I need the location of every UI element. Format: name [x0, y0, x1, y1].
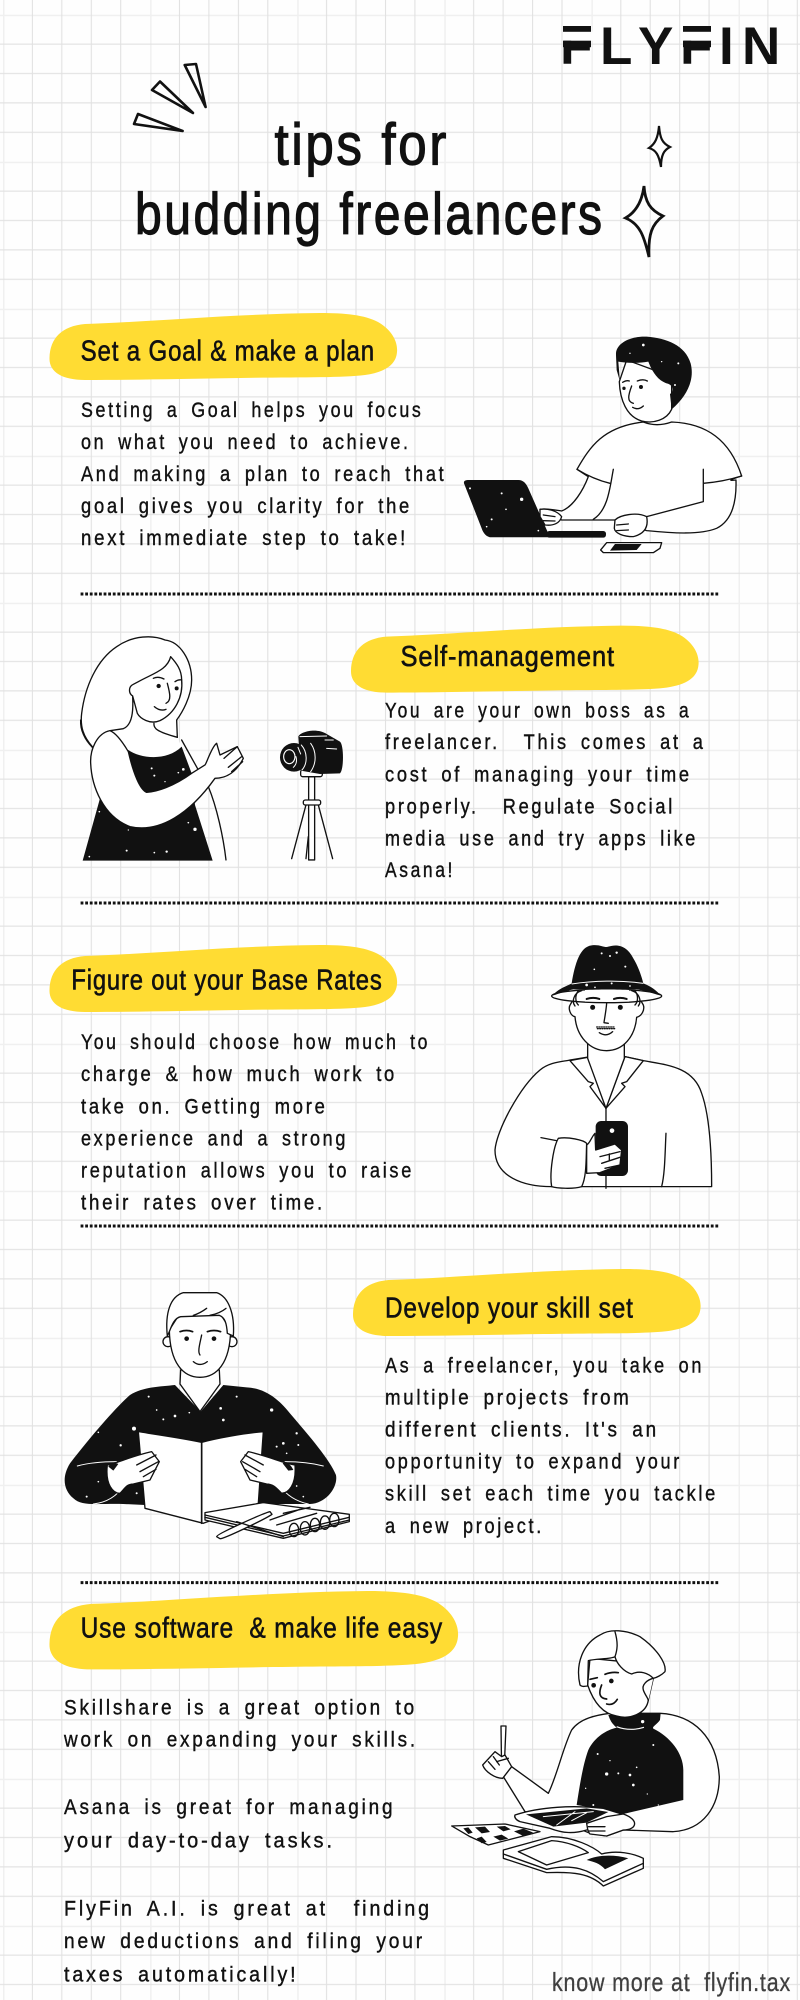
text block: self-management: freelancer. This comes at a — [385, 730, 706, 754]
text block: skill set — [385, 1353, 718, 1538]
logo: FLYFIN: FLYFIN — [560, 17, 780, 76]
heading: base rates: Figure out your Base Rates — [71, 965, 383, 997]
heading: skill set — [353, 1269, 701, 1336]
text block: skill set: different clients. It's an — [385, 1417, 659, 1441]
illustration: man with hat and phone — [495, 945, 712, 1188]
icon: open magazine — [503, 1837, 643, 1886]
text block: self-management: cost of managing your time — [385, 762, 692, 786]
text block: skill set: opportunity to expand your — [385, 1450, 682, 1474]
divider 1 — [81, 592, 719, 596]
icon: camera on tripod — [280, 731, 343, 860]
heading: software: Use software & make life easy — [81, 1613, 443, 1645]
panel: set a goal — [49, 313, 742, 553]
icon: large sparkle — [626, 186, 663, 257]
text block: self-management: You are your own boss as a — [385, 699, 691, 723]
text block: software: FlyFin A.I. is great at finding — [64, 1897, 432, 1921]
text block: base rates: You should choose how much to — [81, 1030, 430, 1054]
heading: software — [49, 1591, 458, 1669]
text block: software: Skillshare is a great option to — [64, 1695, 417, 1719]
icon: contact sheet — [452, 1824, 540, 1845]
icon: burst strokes — [134, 64, 206, 131]
text block: set a goal: Setting a Goal helps you focus — [81, 398, 424, 422]
illustration: man at laptop — [464, 337, 742, 553]
title: budding freelancers — [135, 182, 605, 247]
text block: software: work on expanding your skills. — [63, 1728, 418, 1752]
illustration: person with tablet — [452, 1631, 719, 1886]
panel: skill set — [65, 1269, 718, 1539]
title — [135, 113, 605, 247]
text block: software: Asana is great for managing — [64, 1795, 395, 1819]
text block: self-management — [385, 699, 706, 882]
title: tips for — [274, 113, 449, 178]
icon: notebook and pencil — [205, 1503, 349, 1539]
text block: set a goal: And making a plan to reach that — [81, 462, 446, 486]
text block: set a goal: goal gives you clarity for the — [81, 494, 412, 518]
text block: base rates: charge & how much work to — [81, 1062, 397, 1086]
heading: skill set: Develop your skill set — [385, 1292, 634, 1324]
text block: software: your day-to-day tasks. — [64, 1828, 335, 1852]
heading: set a goal — [49, 313, 397, 380]
text block: base rates: take on. Getting more — [81, 1095, 328, 1119]
text block: set a goal: next immediate step to take! — [81, 526, 408, 550]
text block: base rates — [81, 1030, 430, 1214]
illustration: woman with camera — [81, 637, 343, 861]
text block: skill set: As a freelancer, you take on — [385, 1353, 704, 1377]
text block: software: new deductions and filing your — [64, 1929, 425, 1953]
heading: self-management: Self-management — [400, 641, 615, 673]
text block: set a goal: on what you need to achieve. — [81, 430, 411, 454]
text block: skill set: a new project. — [385, 1514, 544, 1538]
text block: base rates: reputation allows you to raise — [81, 1158, 414, 1182]
text block: skill set: skill set each time you tackle — [385, 1482, 718, 1506]
panel: self-management — [81, 626, 706, 882]
divider 3 — [81, 1224, 719, 1228]
heading: self-management — [351, 626, 699, 693]
illustration: man reading — [65, 1293, 349, 1539]
divider 2 — [81, 902, 719, 904]
heading: base rates — [49, 945, 397, 1012]
heading: set a goal: Set a Goal & make a plan — [81, 336, 375, 368]
panel: base rates — [49, 945, 712, 1214]
text block: self-management: properly. Regulate Social — [385, 794, 675, 818]
text block: self-management: Asana! — [385, 858, 455, 882]
text block: software — [63, 1695, 432, 1986]
text block: set a goal — [81, 398, 446, 550]
text block: skill set: multiple projects from — [385, 1385, 632, 1409]
text block: base rates: experience and a strong — [81, 1126, 348, 1150]
divider 4 — [81, 1581, 719, 1584]
icon: small sparkle — [649, 126, 670, 167]
icon: tablet and hand — [515, 1807, 635, 1836]
panel: software — [49, 1591, 719, 1986]
text block: self-management: media use and try apps like — [385, 826, 698, 850]
text block: base rates: their rates over time. — [81, 1190, 325, 1214]
text block: software: taxes automatically! — [64, 1962, 298, 1986]
